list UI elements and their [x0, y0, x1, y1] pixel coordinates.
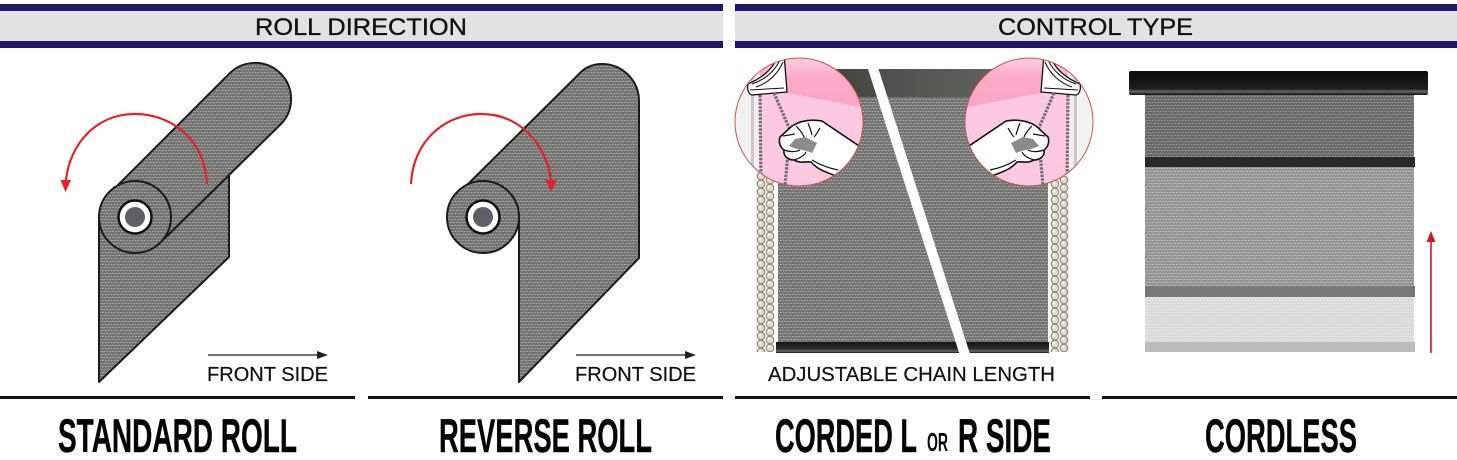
- diagram: standard roll fabric: [99, 63, 291, 382]
- arrow: reverse roll direction: [411, 114, 556, 192]
- headrail: cordless: [1129, 71, 1428, 95]
- chain: left beads: [756, 172, 775, 352]
- header: roll direction: [0, 4, 723, 48]
- inset: right hand pulling chain: [960, 40, 1093, 186]
- shade: cordless stacked positions: [1145, 95, 1415, 352]
- label: adjustable chain length: ADJUSTABLE CHAIN LENGTH: [768, 364, 1055, 386]
- arrow: front side: [208, 351, 328, 359]
- panel: standard roll: [0, 63, 355, 460]
- arrow: front side: [576, 351, 696, 359]
- panel: corded: [735, 40, 1093, 460]
- arrow: standard roll direction: [60, 114, 207, 192]
- label: front side: FRONT SIDE: [575, 364, 696, 386]
- arrow: lift up: [1426, 231, 1436, 353]
- label: front side: FRONT SIDE: [207, 364, 328, 386]
- panel: cordless: [1102, 71, 1457, 460]
- inset: left hand pulling chain: [735, 40, 868, 186]
- title: corded L or R side: OR: [927, 427, 948, 457]
- panel: reverse roll: [368, 64, 723, 460]
- diagram: reverse roll fabric: [447, 64, 639, 382]
- header: control type: [735, 4, 1457, 48]
- chain: right beads: [1050, 172, 1069, 352]
- header: control type: CONTROL TYPE: [998, 14, 1193, 41]
- shade: corded fabric with headrail and bottom bar: [776, 66, 1050, 354]
- header: roll direction: ROLL DIRECTION: [255, 14, 467, 41]
